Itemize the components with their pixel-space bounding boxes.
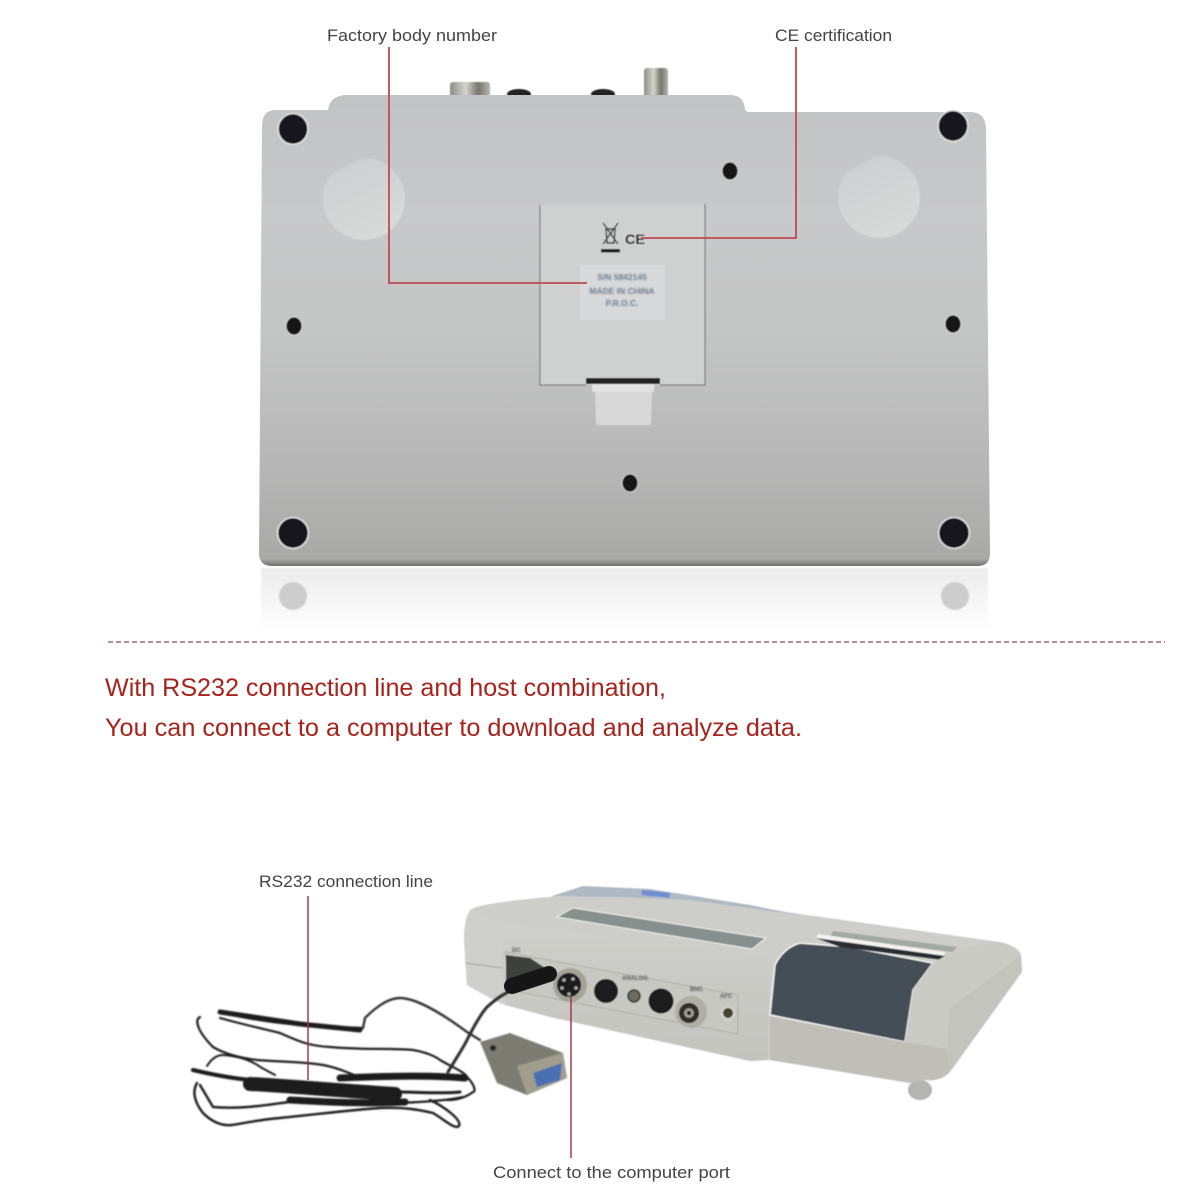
recycling mark xyxy=(601,223,620,252)
callout: factory body number: Factory body number xyxy=(327,26,497,45)
callout: connect to the computer port: Connect to the computer port xyxy=(493,1164,730,1182)
keypad xyxy=(552,886,800,915)
description text: You can connect to a computer to download and analyze data. xyxy=(105,714,802,742)
callout: factory body number xyxy=(327,26,587,283)
foot xyxy=(908,1080,932,1100)
right side face xyxy=(947,955,1022,1072)
callout: RS232 connection line: RS232 connection line xyxy=(259,873,433,891)
serial label: P.R.O.C. xyxy=(606,298,638,308)
description text: With RS232 connection line and host combination, xyxy=(105,674,666,702)
small jack xyxy=(628,990,640,1002)
round recesses xyxy=(323,156,920,240)
output socket xyxy=(648,988,674,1014)
DC socket xyxy=(506,955,545,990)
panel labels: DC xyxy=(512,948,521,954)
floor reflection xyxy=(261,568,988,634)
printer cover xyxy=(770,931,957,1042)
housing top plane xyxy=(464,888,1022,1083)
top connectors xyxy=(450,68,668,99)
panel labels: AFC xyxy=(720,994,733,1000)
device rear view xyxy=(259,68,990,566)
serial label: MADE IN CHINA xyxy=(589,286,655,296)
6-pin socket xyxy=(553,968,587,1002)
panel labels: BNC xyxy=(690,987,704,993)
BNC socket xyxy=(675,996,707,1028)
DB9 connector xyxy=(480,1033,567,1095)
serial label xyxy=(580,265,665,320)
display strip xyxy=(557,908,766,949)
screw holes xyxy=(286,162,961,492)
seam xyxy=(465,963,503,968)
callout: CE certification xyxy=(641,26,892,238)
analog socket xyxy=(594,979,618,1003)
panel labels xyxy=(512,948,733,1000)
front face xyxy=(500,922,770,1061)
right corner block xyxy=(905,942,1021,1048)
CE mark: CE xyxy=(625,231,645,247)
serial label: S/N 5842145 xyxy=(597,272,647,282)
rubber feet xyxy=(278,110,970,548)
device connector view xyxy=(464,886,1022,1100)
battery cover xyxy=(540,204,705,425)
left end face xyxy=(464,910,505,1005)
description text xyxy=(105,674,802,742)
cover latch xyxy=(586,378,660,425)
connector panel xyxy=(505,952,738,1034)
RS232 cable xyxy=(193,990,512,1127)
AFC jack xyxy=(722,1007,734,1019)
callout: CE certification: CE certification xyxy=(775,26,892,45)
DC plug xyxy=(512,974,549,986)
panel labels: ANALOG xyxy=(622,976,648,982)
lower band xyxy=(770,1016,950,1083)
device body xyxy=(259,95,990,566)
